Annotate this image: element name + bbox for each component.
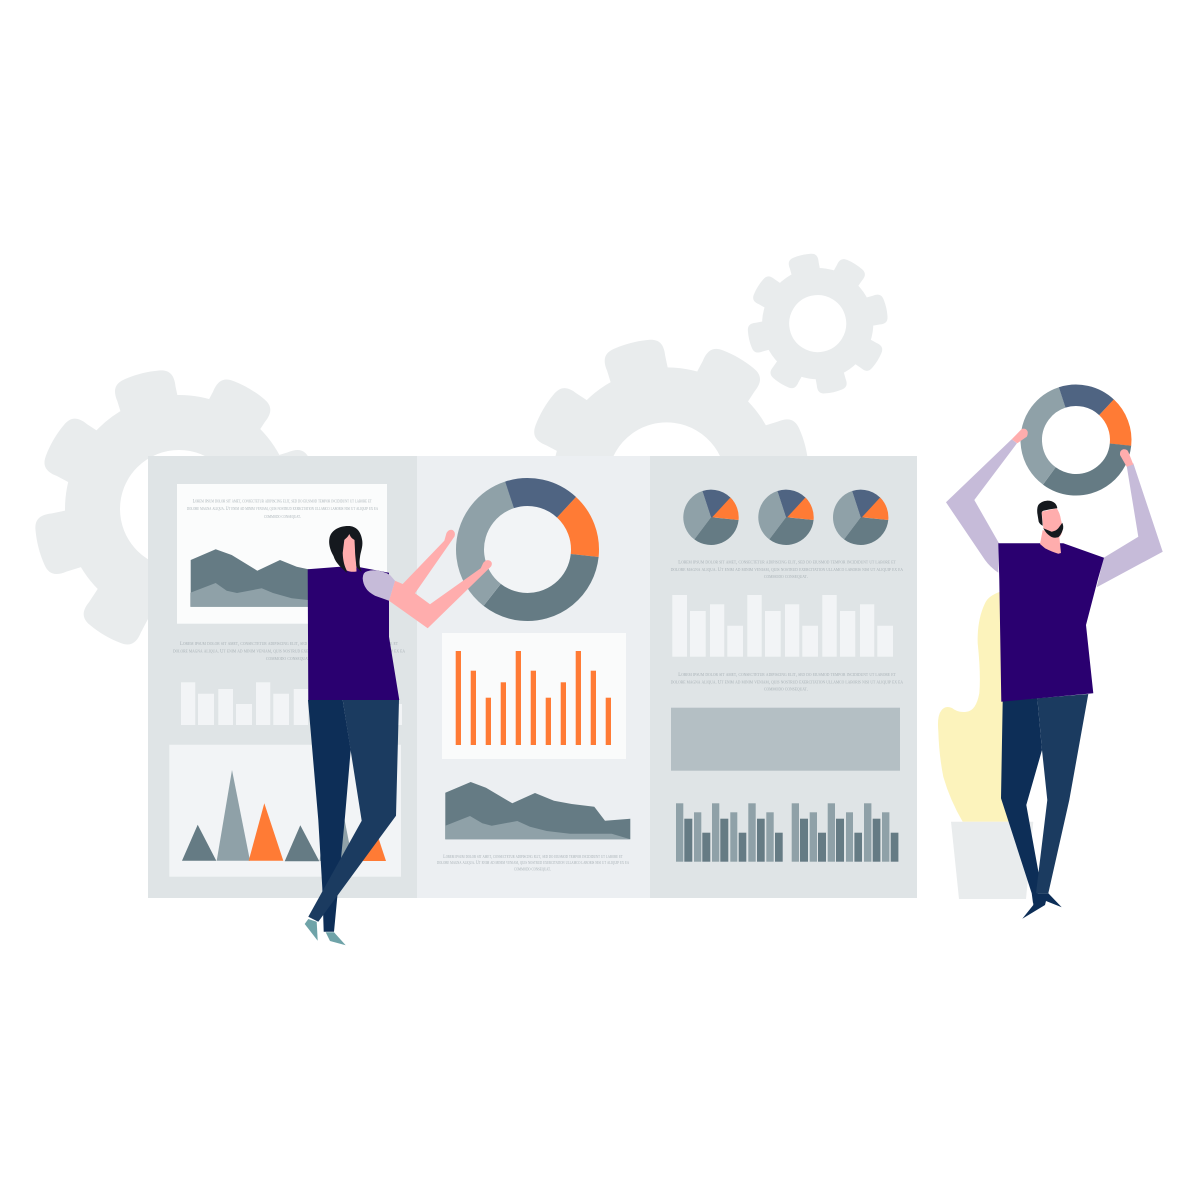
bar chart: left: [181, 682, 402, 725]
gear: large centre: [492, 307, 841, 656]
text block: right paragraph one: Lorem ipsum dolor sit amet, consectetur adipiscing elit, sed do eiusmod tempor incididunt ut labore et: [678, 560, 896, 566]
plant pot: [951, 822, 1033, 899]
man: shoes: [1022, 893, 1062, 919]
panel: left column: [148, 456, 417, 898]
text block: centre paragraph: dolore magna aliqua. Ut enim ad minim veniam, quis nostrud exercitation ullamco laboris nisi ut aliquip ex ea: [437, 860, 629, 866]
woman: trousers: [308, 700, 399, 932]
text block: left column paragraph: Lorem ipsum dolor sit amet, consectetur adipiscing elit, sed do eiusmod tempor incididunt ut labore et: [180, 641, 398, 647]
text block: right paragraph two: commodo consequat.: [764, 686, 808, 692]
pie chart: third: [833, 490, 888, 545]
text block: card caption: commodo consequat.: [264, 514, 301, 520]
text block: card caption: dolore magna aliqua. Ut enim ad minim veniam, quis nostrud exercitation ullamco laboris nisi ut aliquip ex ea: [187, 506, 378, 512]
donut chart: held by man: [1013, 377, 1139, 503]
text block: left column paragraph: commodo consequat.: [266, 656, 311, 662]
panel: right column: [650, 456, 917, 898]
woman: hair: [329, 526, 362, 573]
text block: centre paragraph: [437, 854, 629, 872]
gear: large left: [3, 338, 351, 686]
man: right hand: [1120, 449, 1133, 467]
man: beard: [1043, 523, 1063, 538]
bar chart: right light bars: [672, 595, 893, 657]
man: face: [1042, 508, 1063, 537]
man: right arm: [1097, 463, 1163, 587]
gear: small top right: [733, 239, 902, 408]
text block: left column paragraph: [173, 641, 405, 662]
text block: card caption: [187, 498, 378, 520]
area chart: centre: [445, 782, 630, 839]
text block: right paragraph one: dolore magna aliqua. Ut enim ad minim veniam, quis nostrud exercitation ullamco laboris nisi ut aliquip ex ea: [671, 567, 903, 573]
man: trousers: [1001, 694, 1088, 903]
man: left arm: [946, 439, 1017, 573]
text block: right paragraph two: Lorem ipsum dolor sit amet, consectetur adipiscing elit, sed do eiusmod tempor incididunt ut labore et: [678, 672, 896, 678]
man: left hand: [1012, 429, 1028, 443]
bar chart: paired bars right group: [792, 803, 898, 862]
text block: right paragraph two: dolore magna aliqua. Ut enim ad minim veniam, quis nostrud exercitation ullamco laboris nisi ut aliquip ex ea: [671, 680, 903, 686]
pie chart: first: [683, 490, 739, 545]
area chart: left: [190, 549, 330, 607]
donut chart: large: [446, 468, 609, 631]
figure: woman: [305, 526, 492, 945]
pie chart: second: [758, 490, 814, 545]
woman: shirt: [308, 567, 399, 700]
woman: shoes: [305, 919, 346, 945]
panel: centre column: [417, 456, 650, 898]
text block: right paragraph one: commodo consequat.: [764, 574, 808, 580]
text block: centre paragraph: commodo consequat.: [514, 866, 551, 872]
card: orange bar chart: [442, 633, 626, 759]
text block: right paragraph two: [671, 672, 903, 692]
text block: card caption: Lorem ipsum dolor sit amet, consectetur adipiscing elit, sed do eiusmod tempor incididunt ut labore et: [193, 498, 372, 504]
text block: centre paragraph: Lorem ipsum dolor sit amet, consectetur adipiscing elit, sed do eiusmod tempor incididunt ut labore et: [443, 854, 623, 860]
man: neck: [1040, 530, 1061, 554]
woman: face: [343, 534, 356, 572]
grey block: [671, 708, 900, 771]
plant: yellow leaf: [938, 592, 1010, 822]
figure: man: [946, 429, 1163, 919]
text block: left column paragraph: dolore magna aliqua. Ut enim ad minim veniam, quis nostrud exercitation ullamco laboris nisi ut aliquip ex ea: [173, 649, 405, 655]
text block: right paragraph one: [671, 560, 903, 580]
card: triangle chart: [169, 745, 401, 877]
bar chart: paired bars left group: [676, 803, 783, 862]
man: hair: [1037, 501, 1057, 526]
woman: arms: [389, 530, 492, 628]
woman: sleeve: [363, 570, 395, 601]
man: shirt: [998, 543, 1104, 702]
card: left area chart: [177, 484, 387, 624]
